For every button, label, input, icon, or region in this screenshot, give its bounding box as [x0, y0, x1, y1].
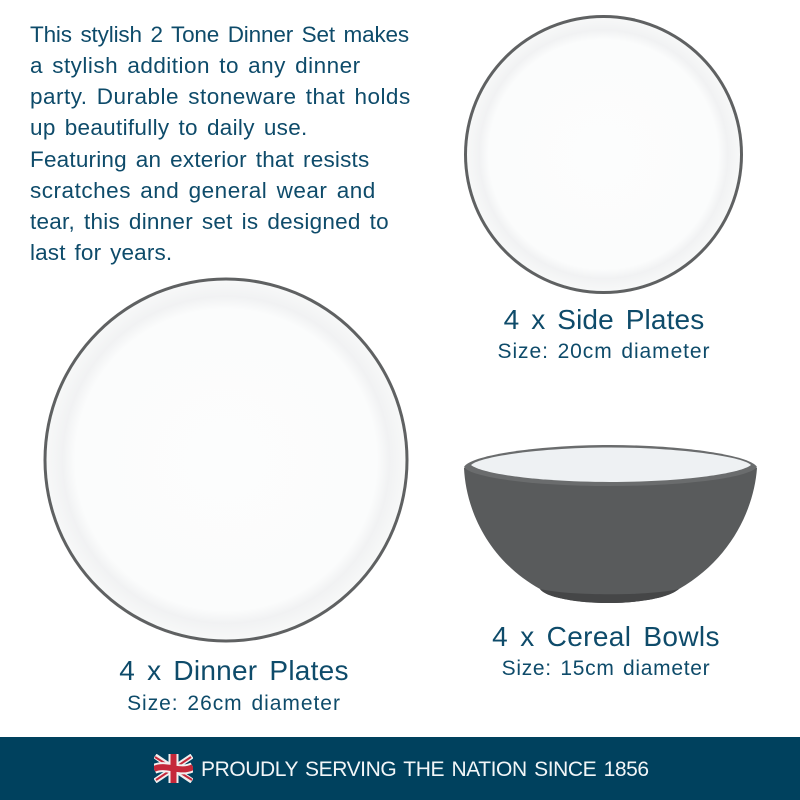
cereal bowls caption: [492, 621, 720, 680]
icon: union jack flag: [154, 754, 193, 783]
dinner plate image: [44, 278, 408, 642]
intro text block: Featuring an exterior that resists: [30, 147, 369, 172]
intro text block: scratches and general wear and: [30, 178, 376, 203]
intro text block: party. Durable stoneware that holds: [30, 84, 411, 109]
cereal bowls caption: 4 x Cereal Bowls: [492, 621, 720, 652]
intro text block: tear, this dinner set is designed to: [30, 209, 389, 234]
side plates caption: 4 x Side Plates: [504, 304, 704, 335]
footer slogan: PROUDLY SERVING THE NATION SINCE 1856: [201, 758, 649, 781]
footer banner: [0, 737, 800, 800]
side plate image: [464, 15, 743, 294]
side plates caption: Size: 20cm diameter: [498, 340, 710, 363]
dinner plates caption: 4 x Dinner Plates: [119, 655, 349, 686]
cereal bowl image: [464, 445, 757, 603]
intro text block: a stylish addition to any dinner: [30, 53, 361, 78]
intro text block: up beautifully to daily use.: [30, 115, 308, 140]
dinner plates caption: Size: 26cm diameter: [127, 692, 341, 715]
dinner plates caption: [119, 655, 349, 715]
intro text block: last for years.: [30, 240, 172, 265]
intro text block: This stylish 2 Tone Dinner Set makes: [30, 22, 409, 47]
intro text block: [30, 22, 411, 265]
cereal bowls caption: Size: 15cm diameter: [502, 657, 710, 680]
side plates caption: [498, 304, 710, 363]
